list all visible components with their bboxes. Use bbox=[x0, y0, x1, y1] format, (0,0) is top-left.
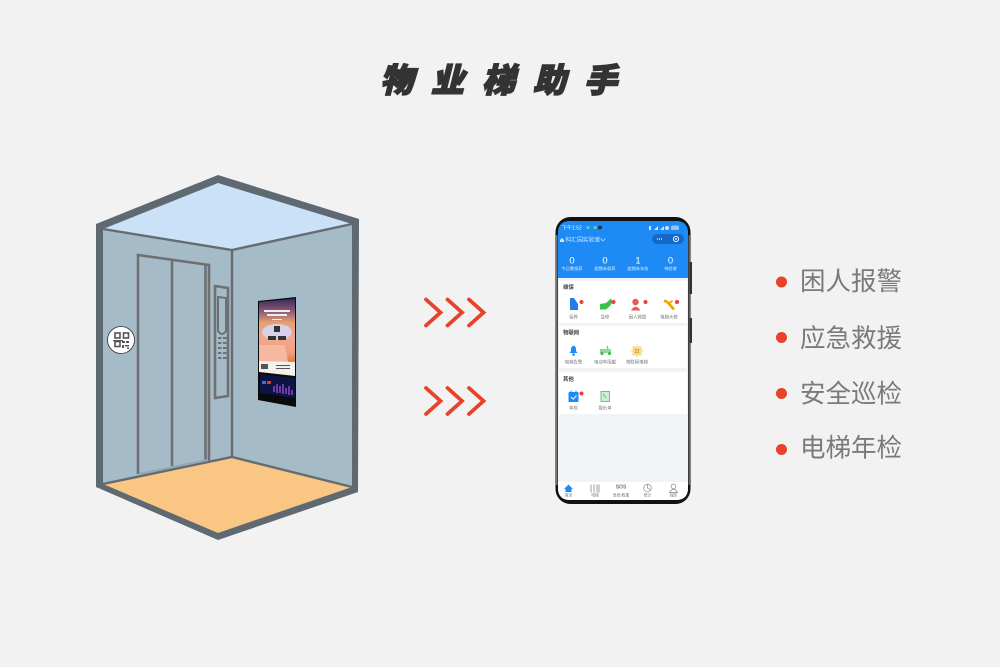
capsule bbox=[652, 234, 684, 244]
floor bbox=[103, 457, 352, 533]
app header bbox=[558, 221, 688, 278]
stat: overdue maintenance: 超期未保养 bbox=[595, 265, 616, 272]
smartphone bbox=[556, 217, 692, 504]
stat: today maintenance: 今日需保养 bbox=[562, 265, 583, 272]
tab: home: 首页 bbox=[565, 492, 572, 498]
arrows: top row bbox=[426, 300, 484, 326]
screen headline bbox=[264, 310, 290, 320]
stat: overdue inspection: 超期未年检 bbox=[628, 265, 649, 272]
phone screen bbox=[558, 221, 688, 500]
tab bar bbox=[558, 482, 688, 500]
QR code badge bbox=[108, 326, 134, 354]
feature: emergency rescue: 应急救援 bbox=[800, 325, 902, 353]
elevator door bbox=[138, 255, 209, 474]
feature list bbox=[776, 268, 902, 462]
card: other bbox=[559, 372, 687, 414]
card: IoT: 物联网电梯 bbox=[626, 358, 649, 366]
icon: overhaul bbox=[664, 300, 679, 310]
card: other: 年检 bbox=[569, 404, 578, 412]
feature: annual inspection: 电梯年检 bbox=[800, 434, 902, 462]
left wall bbox=[103, 229, 232, 484]
card: IoT bbox=[559, 326, 687, 368]
icon: alarm bell bbox=[570, 346, 578, 356]
title: 物业梯助手 bbox=[378, 63, 642, 100]
nav title: 科汇园实验室 bbox=[566, 236, 600, 244]
tab: SOS: 急修/救援 bbox=[613, 492, 629, 498]
stat: pending acceptance: 待验收 bbox=[664, 265, 678, 272]
card: maintenance: 急修 bbox=[601, 314, 610, 320]
icon: maintenance bbox=[570, 298, 584, 310]
card: maintenance: 保养 bbox=[569, 314, 578, 320]
card: other: 报价单 bbox=[598, 404, 612, 412]
stat: today maintenance bbox=[562, 256, 583, 272]
tab: SOS bbox=[613, 484, 629, 498]
stat: overdue maintenance bbox=[595, 256, 616, 272]
icon: quotation bbox=[601, 392, 610, 402]
tab: SOS: SOS bbox=[616, 484, 627, 490]
icon: IoT elevator bbox=[630, 344, 644, 358]
card: other: 其他 bbox=[563, 375, 574, 383]
feature: trapped rescue alarm: 困人报警 bbox=[800, 268, 902, 296]
ceiling bbox=[103, 183, 352, 250]
card: maintenance: 困人救援 bbox=[629, 314, 647, 320]
card: maintenance: 维保 bbox=[563, 283, 574, 291]
elevator car illustration bbox=[96, 175, 359, 540]
tab: statistics: 统计 bbox=[644, 492, 651, 498]
elevator outer shell bbox=[96, 175, 359, 540]
stat: pending acceptance: 0 bbox=[668, 256, 673, 266]
card: maintenance: 电梯大修 bbox=[660, 314, 678, 320]
wall-mounted advertising screen bbox=[258, 297, 296, 407]
stat: today maintenance: 0 bbox=[569, 256, 575, 266]
icon: rescue bbox=[631, 299, 648, 310]
icon: scooter bbox=[600, 346, 611, 355]
phone body bbox=[556, 217, 690, 504]
stat: overdue maintenance: 0 bbox=[602, 256, 608, 266]
stat: pending acceptance bbox=[664, 256, 678, 272]
icon: repair bbox=[600, 298, 616, 310]
card: IoT: 物联网 bbox=[563, 328, 579, 336]
card: IoT: 电动车阻截 bbox=[594, 358, 617, 366]
wall edge lines bbox=[103, 224, 352, 487]
card: maintenance bbox=[559, 281, 687, 323]
stat: overdue inspection: 1 bbox=[635, 256, 641, 266]
tab: mine: 我的 bbox=[670, 492, 677, 498]
icon: calendar bbox=[568, 390, 584, 402]
stat: overdue inspection bbox=[628, 256, 649, 272]
feature: safety patrol: 安全巡检 bbox=[800, 380, 902, 408]
status bar: 下午1:52 bbox=[562, 224, 582, 232]
right wall bbox=[232, 224, 352, 487]
tab: elevator: 电梯 bbox=[591, 492, 599, 498]
card: IoT: 电梯告警 bbox=[565, 358, 583, 366]
control panel bbox=[215, 286, 228, 398]
arrows: bottom row bbox=[426, 388, 484, 414]
